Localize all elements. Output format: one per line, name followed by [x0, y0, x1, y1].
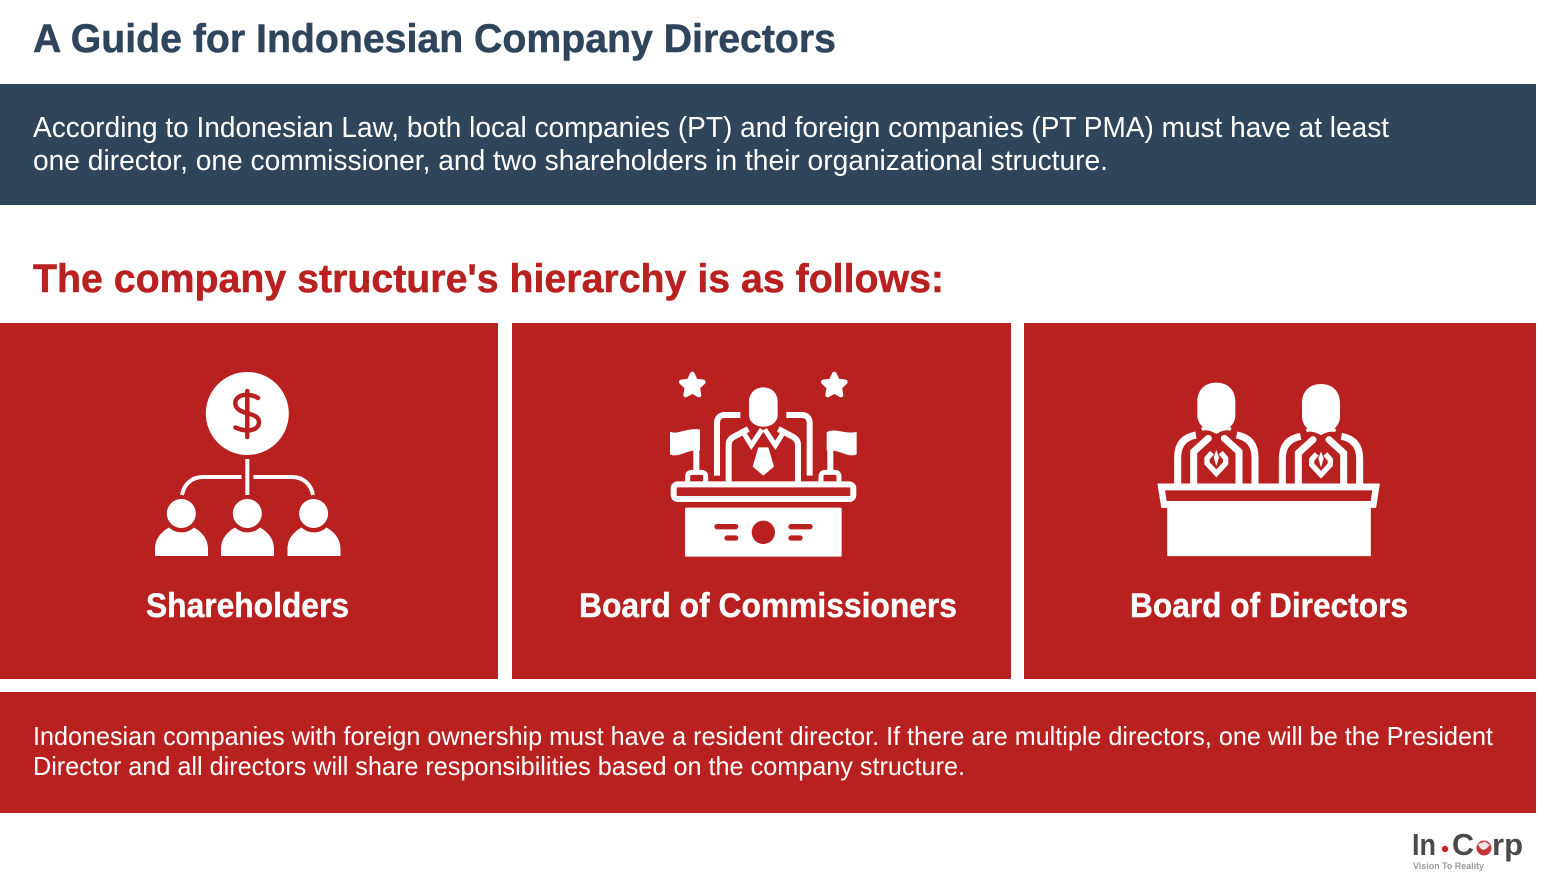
icon: commissioner at podium — [671, 374, 856, 557]
label: board of directors: Board of Directors — [1130, 587, 1408, 625]
title: A Guide for Indonesian Company Directors — [33, 17, 836, 61]
icon: directors at table — [1158, 383, 1379, 556]
logo: InCorp — [1412, 827, 1523, 872]
panel: board of directors — [1024, 323, 1536, 679]
logo: InCorp: In — [1412, 827, 1436, 862]
logo: InCorp: Vision To Reality — [1413, 861, 1485, 872]
panel: resident director note — [0, 692, 1536, 813]
label: shareholders: Shareholders — [146, 587, 349, 625]
panel: shareholders — [0, 323, 498, 679]
section heading: The company structure's hierarchy is as follows: — [33, 257, 944, 301]
panel: introduction: one director, one commissioner, and two shareholders in their organizational structure. — [33, 145, 1108, 177]
icon part: right director — [1282, 384, 1360, 484]
icon: shareholders network — [155, 372, 340, 556]
logo: InCorp: C — [1452, 827, 1474, 862]
panel: introduction: According to Indonesian Law, both local companies (PT) and foreign companies (PT PMA) must have at least — [33, 112, 1389, 144]
panel: resident director note: Director and all directors will share responsibilities based on the company structure. — [33, 751, 965, 781]
panel: introduction — [0, 84, 1536, 205]
panel: resident director note: Indonesian companies with foreign ownership must have a resident director. If there are multiple directors, one will be the President — [33, 721, 1494, 751]
label: board of commissioners: Board of Commissioners — [579, 587, 957, 625]
logo: InCorp: rp — [1492, 827, 1523, 862]
icon part: left director — [1178, 383, 1255, 484]
panel: board of commissioners — [512, 323, 1011, 679]
